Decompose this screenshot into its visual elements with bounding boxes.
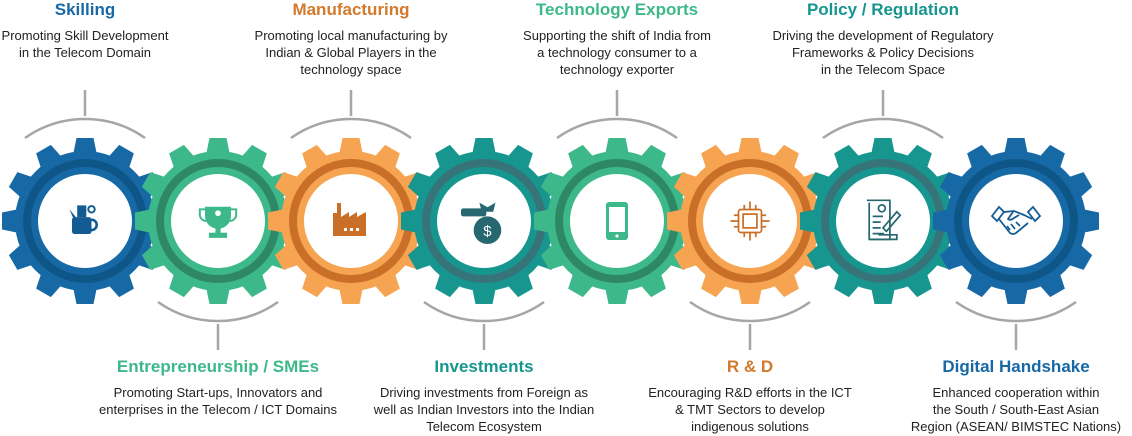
text: policy: Driving the development of Regulatory [772,28,994,43]
text: investments: well as Indian Investors into the Indian [374,402,594,417]
text: manufacturing: technology space [300,62,402,77]
text: manufacturing [255,0,448,77]
icon: pen cup [69,205,97,234]
text: R&D [648,357,852,434]
text: policy [772,0,994,77]
text: investments: Investments [434,357,534,376]
text: technology exports: technology exporter [560,62,674,77]
text: skilling [2,0,168,60]
gear 1: skilling [2,138,168,304]
text: entrepreneurship [99,357,337,417]
gear 4: investments [401,138,567,304]
text: digital handshake [911,357,1121,434]
text: digital handshake: Region (ASEAN/ BIMSTEC Nations) [911,419,1121,434]
gear 8: digital handshake [933,138,1099,304]
text: digital handshake: the South / South-East Asian [933,402,1099,417]
gear 6: R&D [667,138,833,304]
text: technology exports: Supporting the shift of India from [523,28,711,43]
text: investments: Driving investments from Foreign as [380,385,588,400]
text: digital handshake: Enhanced cooperation within [933,385,1099,400]
text: entrepreneurship: Entrepreneurship / SMEs [117,357,319,376]
text: R&D: & TMT Sectors to develop [675,402,825,417]
gear 5: technology exports [534,138,700,304]
text: investments [374,357,594,434]
text: R&D: Encouraging R&D efforts in the ICT [648,385,852,400]
text: manufacturing: Indian & Global Players in the [265,45,437,60]
text: entrepreneurship: enterprises in the Telecom / ICT Domains [99,402,337,417]
text: digital handshake: Digital Handshake [942,357,1090,376]
text: skilling: Promoting Skill Development [2,28,168,43]
text: manufacturing: Promoting local manufacturing by [255,28,447,43]
icon: money bag: $ [483,223,492,240]
icon: money bag [461,203,501,244]
text: entrepreneurship: Promoting Start-ups, Innovators and [114,385,322,400]
text: skilling: in the Telecom Domain [19,45,151,60]
text: skilling: Skilling [55,0,115,19]
gear 2: entrepreneurship [135,138,301,304]
icon: phone [606,202,628,240]
text: manufacturing: Manufacturing [292,0,410,19]
gear 3: manufacturing [268,138,434,304]
text: technology exports: a technology consumer to a [537,45,697,60]
icon: chip [730,201,770,241]
icon: factory [333,203,366,236]
text: policy: in the Telecom Space [821,62,945,77]
text: investments: Telecom Ecosystem [426,419,542,434]
icon: handshake [992,207,1040,234]
text: policy: Policy / Regulation [807,0,959,19]
text: technology exports: Technology Exports [536,0,698,19]
text: R&D: R & D [727,357,773,376]
gear 7: policy [800,138,966,304]
text: R&D: indigenous solutions [691,419,809,434]
icon: trophy [200,207,236,238]
text: policy: Frameworks & Policy Decisions [792,45,974,60]
icon: document with pen [867,200,900,239]
text: technology exports [523,0,711,77]
